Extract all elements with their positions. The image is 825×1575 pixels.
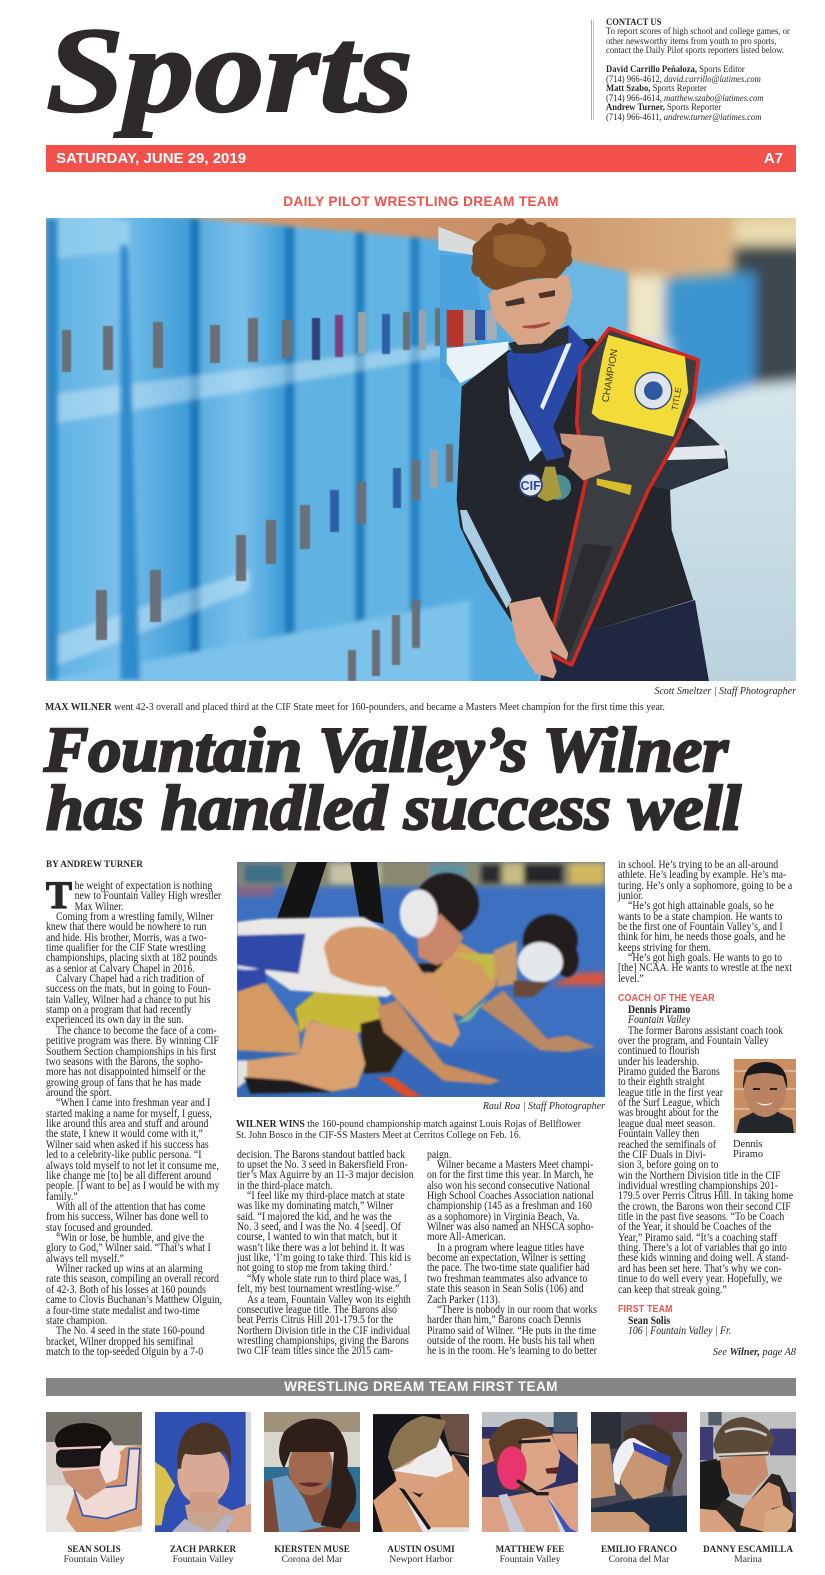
byline: BY ANDREW TURNER	[46, 859, 143, 869]
story column 3: “There is nobody in our room that works	[437, 1304, 597, 1316]
story column 2: wasn’t like there was a lot behind it. It was	[236, 1242, 404, 1254]
contact us block: (714) 966-4614, matthew.szabo@latimes.com	[606, 94, 764, 104]
story column 4 with coach and first team: league title in the first year	[618, 1087, 723, 1099]
story column 4 with coach and first team: win the Northern Division title in the CIF	[618, 1170, 781, 1182]
story column 1: growing group of fans that he has made	[46, 1077, 201, 1089]
contact us block: other newsworthy items from youth to pro sports,	[606, 37, 777, 47]
player name: Austin Osumi: AUSTIN OSUMI	[387, 1544, 455, 1554]
story column 4 with coach and first team: individual wrestling championships 201-	[618, 1180, 778, 1192]
story column 4 with coach and first team: was brought about for the	[618, 1107, 718, 1119]
story column 4 with coach and first team: 106 | Fountain Valley | Fr.	[628, 1325, 731, 1337]
story column 1: stay focused and grounded.	[46, 1222, 153, 1234]
bottom wrestler	[417, 940, 497, 1017]
story column 4 with coach and first team: Fountain Valley	[628, 1014, 690, 1026]
story column 4 with coach and first team: “He’s got high goals. He wants to go to	[628, 952, 782, 964]
story column 1: new to Fountain Valley High wrestler	[75, 890, 221, 902]
thumbnail: Sean Solis	[46, 1412, 142, 1532]
story column 1: always tell myself.”	[46, 1253, 124, 1265]
team banner: WRESTLING DREAM TEAM FIRST TEAM	[284, 1379, 558, 1394]
story column 1: rate this season, compiling an overall record	[46, 1273, 219, 1285]
pants	[540, 600, 709, 683]
contact us block: contact the Daily Pilot sports reporters listed below.	[606, 46, 784, 56]
story column 4 with coach and first team: FIRST TEAM	[618, 1304, 673, 1315]
contact us block: (714) 966-4612, david.carrillo@latimes.com	[606, 75, 761, 85]
contact us block: Matt Szabo, Sports Reporter	[606, 84, 707, 94]
thumbnail: Kiersten Muse	[264, 1412, 360, 1532]
locks	[62, 308, 453, 681]
player name: Matthew Fee: MATTHEW FEE	[496, 1544, 564, 1554]
story column 1: Wilner racked up wins at an alarming	[56, 1263, 203, 1275]
story column 3: Wilner became a Masters Meet champi-	[437, 1159, 593, 1171]
story column 1: petitive program was there. By winning CIF	[46, 1035, 219, 1047]
thumbnail: Danny Escamilla	[700, 1412, 796, 1532]
story column 3: state this season in Sean Solis (106) and	[427, 1283, 583, 1295]
lower hand	[508, 597, 568, 678]
story column 4 with coach and first team: the crown, the Barons won their second CIF	[618, 1201, 791, 1213]
story column 3: more All-American.	[427, 1231, 505, 1243]
story column 2: in the third-place match.	[236, 1180, 332, 1192]
story column 1: stamp on a program that had recently	[46, 1004, 191, 1016]
story column 1: Max Wilner.	[75, 901, 123, 913]
player name: Austin Osumi: Newport Harbor	[389, 1554, 453, 1565]
story column 3: Wilner was also named an NHSCA sopho-	[427, 1221, 594, 1233]
story column 3: paign.	[427, 1148, 451, 1160]
story column 3: Zach Parker (113).	[427, 1294, 500, 1306]
story column 4 with coach and first team: [the] NCAA. He wants to wrestle at the next	[618, 962, 792, 974]
section heading: DAILY PILOT WRESTLING DREAM TEAM	[283, 194, 559, 209]
story column 1: success on the mats, but in going to Foun-	[46, 983, 211, 995]
contact rule	[591, 20, 594, 120]
story column 2: “My whole state run to third place was, I	[247, 1273, 406, 1285]
story column 1: two seasons with the Barons, the sopho-	[46, 1056, 203, 1068]
player name: Danny Escamilla: DANNY ESCAMILLA	[703, 1544, 793, 1554]
story column 1: state champion.	[46, 1315, 107, 1327]
coach photo caption	[733, 1138, 763, 1160]
story column 4 with coach and first team: wants to be a state champion. He wants to	[618, 911, 782, 923]
story column 4 with coach and first team: “He’s got high attainable goals, so he	[628, 900, 774, 912]
story column 2: decision. The Barons standout battled back	[236, 1148, 405, 1160]
main photo caption: MAX WILNER went 42-3 overall and placed third at the CIF State meet for 160-pounders, and became a Masters Meet champion for the first time this year.	[45, 702, 665, 713]
story column 1: With all of the attention that has come	[56, 1201, 205, 1213]
story column 4 with coach and first team: tinue to do well every year. Hopefully, we	[618, 1273, 782, 1285]
story column 3: Piramo said of Wilner. “He puts in the time	[427, 1325, 596, 1337]
story column 3: become an expectation, Wilner is setting	[427, 1252, 585, 1264]
headline: Fountain Valley’s Wilner	[43, 716, 729, 785]
player name: Zach Parker	[170, 1544, 236, 1565]
date bar	[46, 145, 796, 172]
jacket	[457, 338, 728, 628]
story column 3: the pace. The two-time state qualifier had	[427, 1262, 589, 1274]
player name: Kiersten Muse: Corona del Mar	[282, 1554, 342, 1565]
story column 2: beat Perris Citrus Hill 201-179.5 for the	[236, 1314, 393, 1326]
story column 2	[236, 1148, 414, 1357]
story column 1: and hide. His brother, Morris, was a two-	[46, 932, 207, 944]
story column 2: No. 3 seed, and I was the No. 4 [seed]. Of	[236, 1221, 400, 1233]
story column 1: “When I came into freshman year and I	[56, 1097, 210, 1109]
coach photo caption: Dennis	[733, 1138, 762, 1150]
story column 4 with coach and first team: of the Year, it should be Coaches of the	[618, 1221, 771, 1233]
contact us block: David Carrillo Peñaloza, Sports Editor	[606, 65, 745, 75]
story column 1: Calvary Chapel had a rich tradition of	[56, 973, 204, 985]
story column 2: As a team, Fountain Valley won its eighth	[247, 1294, 410, 1306]
boy figure, drawn in 3x crop units: CHAMPION	[600, 348, 621, 403]
story column 1: started making a name for myself, I guess,	[46, 1108, 212, 1120]
story column 1: of 42-3. Both of his losses at 160 pounds	[46, 1284, 206, 1296]
story column 4 with coach and first team: to their eighth straight	[618, 1076, 705, 1088]
story column 4 with coach and first team: 179.5 over Perris Citrus Hill. In taking home	[618, 1190, 793, 1202]
story column 1: like change me [to] be all different around	[46, 1170, 211, 1182]
player name: Sean Solis: SEAN SOLIS	[67, 1544, 121, 1554]
story column 4 with coach and first team: ard has been set here. That’s why we con-	[618, 1263, 781, 1275]
story column 4 with coach and first team: sion 3, before going on to	[618, 1159, 718, 1171]
thumbnail: Matthew Fee	[482, 1412, 578, 1532]
story column 2: “I feel like my third-place match at state	[247, 1190, 404, 1202]
team banner	[46, 1378, 796, 1396]
story column 2: Northern Division title in the CIF individual	[236, 1325, 410, 1337]
story column 1: glory to God,” Wilner said. “That’s what I	[46, 1242, 211, 1254]
story column 3: outside of the room. He busts his tail when	[427, 1335, 594, 1347]
story column 4 with coach and first team: league dual meet season.	[618, 1118, 715, 1130]
story column 4 with coach and first team: Sean Solis	[628, 1315, 670, 1327]
player name: Kiersten Muse: KIERSTEN MUSE	[274, 1544, 350, 1554]
story column 3: also won his second consecutive National	[427, 1180, 590, 1192]
story column 4 with coach and first team: reached the semifinals of	[618, 1138, 716, 1150]
story column 2: not going to stop me from taking third.’	[236, 1262, 392, 1274]
story column 4 with coach and first team: COACH OF THE YEAR	[618, 993, 715, 1004]
story column 4 with coach and first team: junior.	[618, 890, 643, 902]
story column 2: course, I wanted to win that match, but it	[236, 1231, 397, 1243]
story column 1: knew that there would be nowhere to run	[46, 921, 206, 933]
story column 3: on for the first time this year. In March, he	[427, 1169, 593, 1181]
player name: Emilio Franco: Corona del Mar	[609, 1554, 669, 1565]
story column 1: The No. 4 seed in the state 160-pound	[56, 1325, 205, 1337]
player name: Austin Osumi	[387, 1544, 455, 1565]
contact us block: To report scores of high school and college games, or	[606, 27, 790, 37]
story column 3: championship (145 as a freshman and 160	[427, 1200, 592, 1212]
story column 4 with coach and first team: continued to flourish	[618, 1045, 699, 1057]
hair	[471, 219, 572, 290]
date bar: A7	[764, 150, 783, 167]
contact us block	[606, 18, 790, 123]
headline	[42, 716, 742, 843]
story column 1	[46, 880, 222, 1358]
main photo: wrestler with belt by lockers	[46, 218, 796, 681]
story column 4 with coach and first team: The former Barons assistant coach took	[628, 1025, 783, 1037]
story column 4 with coach and first team: of the Surf League, which	[618, 1097, 720, 1109]
player name: Sean Solis: Fountain Valley	[64, 1554, 124, 1565]
story column 1: family.”	[46, 1191, 78, 1203]
story column 2: felt, my best tournament wrestling-wise.”	[236, 1283, 399, 1295]
story column 1: from his success, Wilner has done well to	[46, 1211, 208, 1223]
player name: Emilio Franco	[601, 1544, 677, 1565]
story column 3: two freshman teammates also advance to	[427, 1273, 587, 1285]
story column 2: wrestling championships, giving the Barons	[236, 1335, 408, 1347]
story column 4 with coach and first team: thing. There’s a lot of variables that go into	[618, 1242, 787, 1254]
story column 1: The chance to become the face of a com-	[56, 1025, 217, 1037]
story column 4 with coach and first team: athlete. He’s leading by example. He’s ma-	[618, 869, 786, 881]
story column 4 with coach and first team: turing. He’s only a sophomore, going to be a	[618, 880, 792, 892]
story column 3: High School Coaches Association national	[427, 1190, 593, 1202]
story column 4 with coach and first team: be the first one of Fountain Valley’s, and I	[618, 921, 783, 933]
player name: Matthew Fee	[496, 1544, 564, 1565]
wrestling photo caption: St. John Bosco in the CIF-SS Masters Meet at Cerritos College on Feb. 16.	[236, 1130, 521, 1141]
story column 4 with coach and first team: Piramo guided the Barons	[618, 1066, 720, 1078]
story column 4 with coach and first team: these kids winning and doing well. A stand-	[618, 1252, 789, 1264]
story column 3: harder than him,” Barons coach Dennis	[427, 1314, 581, 1326]
photo credit: Scott Smeltzer | Staff Photographer	[654, 686, 796, 697]
ribbon	[507, 325, 589, 461]
player name: Matthew Fee: Fountain Valley	[500, 1554, 560, 1565]
story column 4 with coach and first team: title in the past five seasons. “To be Coach	[618, 1211, 784, 1223]
coach photo caption: Piramo	[733, 1149, 763, 1160]
story column 1: more has not disappointed himself or the	[46, 1066, 206, 1078]
story column 2: was like my dominating match,” Wilner	[236, 1200, 393, 1212]
story column 1: led to a celebrity-like public persona. “I	[46, 1149, 202, 1161]
contact us block: Andrew Turner, Sports Reporter	[606, 103, 721, 113]
story column 1: people. [I want to be] as I would be with my	[46, 1180, 219, 1192]
story column 1: experienced its own day in the sun.	[46, 1014, 184, 1026]
player name: Sean Solis	[64, 1544, 124, 1565]
story column 1: time qualifier for the CIF State wrestling	[46, 942, 206, 954]
player name: Zach Parker: ZACH PARKER	[170, 1544, 236, 1554]
contact us block: (714) 966-4611, andrew.turner@latimes.com	[606, 113, 761, 123]
boy figure, drawn in 3x crop units: TITLE	[669, 386, 683, 411]
story column 1: match to the top-seeded Olguin by a 7-0	[46, 1346, 203, 1358]
belt	[547, 328, 698, 665]
hand on belt	[560, 433, 611, 481]
wrestling photo caption	[236, 1119, 581, 1141]
story column 1: “Win or lose, be humble, and give the	[56, 1232, 204, 1244]
story column 1: he weight of expectation is nothing	[75, 880, 212, 892]
story column 4 with coach and first team: Year,” Piramo said. “It’s a coaching staff	[618, 1232, 777, 1244]
story column 3: as a sophomore) in Virginia Beach, Va.	[427, 1211, 579, 1223]
story column 1: bracket, Wilner dropped his semifinal	[46, 1336, 193, 1348]
thumbnail: Emilio Franco	[591, 1412, 687, 1532]
contact us block: CONTACT US	[606, 18, 661, 28]
story column 1: a four-time state medalist and two-time	[46, 1305, 200, 1317]
photo credit 2: Raul Roa | Staff Photographer	[483, 1101, 605, 1112]
player name: Zach Parker: Fountain Valley	[173, 1554, 233, 1565]
player name: Kiersten Muse	[274, 1544, 350, 1565]
story column 3: In a program where league titles have	[437, 1242, 584, 1254]
story column 2: two CIF team titles since the 2015 cam-	[236, 1345, 393, 1357]
story column 1: Coming from a wrestling family, Wilner	[56, 911, 213, 923]
player name: Danny Escamilla: Marina	[734, 1554, 762, 1565]
story column 4 with coach and first team: over the program, and Fountain Valley	[618, 1035, 769, 1047]
story column 1: the state, I knew it would come with it,”	[46, 1128, 203, 1140]
story column 1: as a senior at Calvary Chapel in 2016.	[46, 963, 195, 975]
neck and face	[508, 327, 568, 353]
story column 2: said. “I majored the kid, and he was the	[236, 1211, 391, 1223]
story column 1: around the sport.	[46, 1087, 112, 1099]
story column 1: like around this area and stuff and around	[46, 1118, 208, 1130]
story column 2: consecutive league title. The Barons also	[236, 1304, 396, 1316]
story column 4 with coach and first team: Dennis Piramo	[628, 1004, 690, 1016]
thumbnail: Zach Parker	[155, 1412, 251, 1532]
headline: has handled success well	[46, 773, 742, 843]
date bar: SATURDAY, JUNE 29, 2019	[56, 150, 246, 167]
story column 3: he is in the room. He’s learning to do better	[427, 1345, 597, 1357]
story column 1: Wilner said when asked if his success has	[46, 1139, 209, 1151]
story column 4 with coach and first team: the CIF Duals in Divi-	[618, 1149, 706, 1161]
jump line: See Wilner, page A8	[713, 1347, 796, 1358]
story column 4 with coach and first team: level.”	[618, 973, 644, 985]
story column 2: just like, ‘I’m going to take third. This kid is	[236, 1252, 410, 1264]
story column 4 with coach and first team: think for him, he needs those goals, and he	[618, 931, 785, 943]
top wrestler	[237, 983, 301, 1053]
story column 2: to upset the No. 3 seed in Bakersfield Fron-	[236, 1159, 407, 1171]
coach photo	[734, 1059, 796, 1133]
story column 1: Southern Section championships in his first	[46, 1046, 216, 1058]
story column 1: always told myself to not let it consume me,	[46, 1160, 219, 1172]
wrestling photo caption: WILNER WINS the 160-pound championship match against Louis Rojas of Bellflower	[236, 1119, 581, 1130]
story column 2: tier’s Max Aguirre by an 11-3 major decision	[236, 1169, 413, 1181]
medals	[546, 475, 571, 500]
story column 4 with coach and first team: keeps striving for them.	[618, 942, 711, 954]
wrestling match photo	[237, 862, 605, 1097]
player name: Emilio Franco: EMILIO FRANCO	[601, 1544, 677, 1554]
boy figure, drawn in 3x crop units: CIF	[520, 479, 541, 493]
story column 4 with coach and first team: in school. He’s trying to be an all-around	[618, 859, 778, 871]
thumbnail: Austin Osumi	[373, 1414, 469, 1532]
story column 4 with coach and first team: Fountain Valley then	[618, 1128, 699, 1140]
sleeve stripes	[610, 445, 726, 462]
player name: Danny Escamilla	[703, 1544, 793, 1565]
story column 1: came to Clovis Buchanan’s Matthew Olguin,	[46, 1294, 222, 1306]
drop cap: T	[46, 874, 72, 917]
story column 4 with coach and first team	[618, 859, 793, 1337]
boy figure, drawn in 3x crop units	[438, 219, 728, 683]
story column 1: tain Valley, Wilner had a chance to put his	[46, 994, 210, 1006]
title: Sports nameplate: Sports	[46, 3, 413, 138]
story column 4 with coach and first team: under his leadership.	[618, 1056, 699, 1068]
story column 4 with coach and first team: can keep that streak going.”	[618, 1284, 727, 1296]
story column 1: championships, placing sixth at 182 pounds	[46, 952, 217, 964]
story column 3	[427, 1148, 597, 1357]
